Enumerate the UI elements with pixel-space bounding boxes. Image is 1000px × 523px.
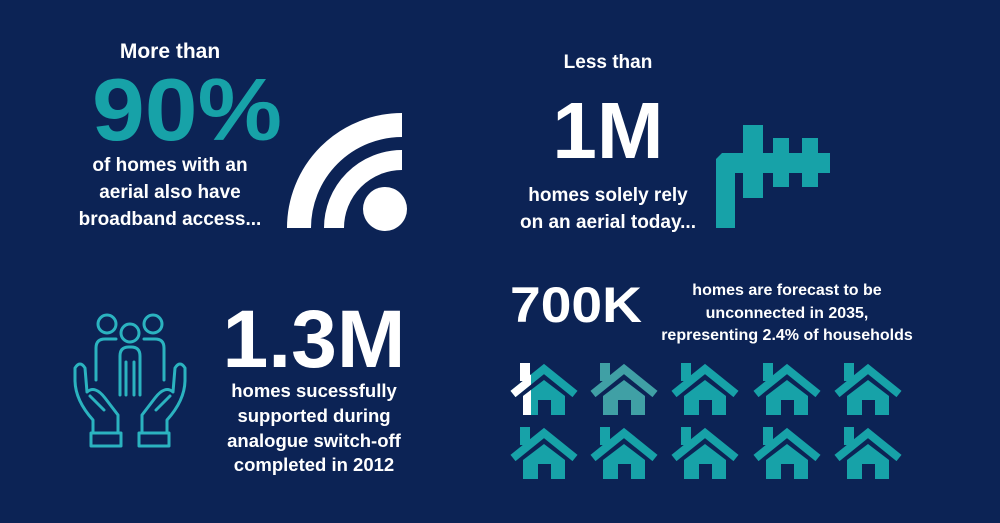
label: more than: More than [120, 40, 220, 63]
chart: house pictogram grid [513, 363, 899, 479]
text: analogue switch-off: analogue switch-off [227, 430, 402, 451]
label: less than: Less than [564, 52, 652, 73]
text: analogue switch-off: completed in 2012 [234, 454, 394, 475]
text: aerial reliance: on an aerial today... [520, 212, 696, 233]
text: forecast unconnected: homes are forecast to be [692, 282, 882, 299]
text: analogue switch-off: homes sucessfully [231, 380, 397, 401]
icon: wifi signal [299, 125, 407, 231]
big number: 1M: 1M [552, 86, 664, 175]
stat block: 700K [510, 277, 913, 344]
text: broadband description: of homes with an [92, 155, 248, 176]
text: broadband description: aerial also have [99, 182, 241, 203]
stat block: 90% [79, 40, 282, 230]
text: forecast unconnected: representing 2.4% of households [661, 327, 913, 344]
stat block: 1.3M [222, 294, 406, 475]
text: aerial reliance: homes solely rely [528, 185, 688, 206]
stat block: 1M [520, 52, 696, 233]
icon: TV aerial [716, 125, 830, 228]
text: broadband description: broadband access... [79, 209, 261, 230]
text: forecast unconnected: unconnected in 2035, [706, 305, 868, 322]
big number: 700K: 700K [510, 277, 642, 333]
big number: 1.3M: 1.3M [222, 294, 406, 385]
big number: 90%: 90% [92, 60, 282, 159]
icon: hands supporting people [75, 315, 185, 446]
text: analogue switch-off: supported during [237, 405, 391, 426]
